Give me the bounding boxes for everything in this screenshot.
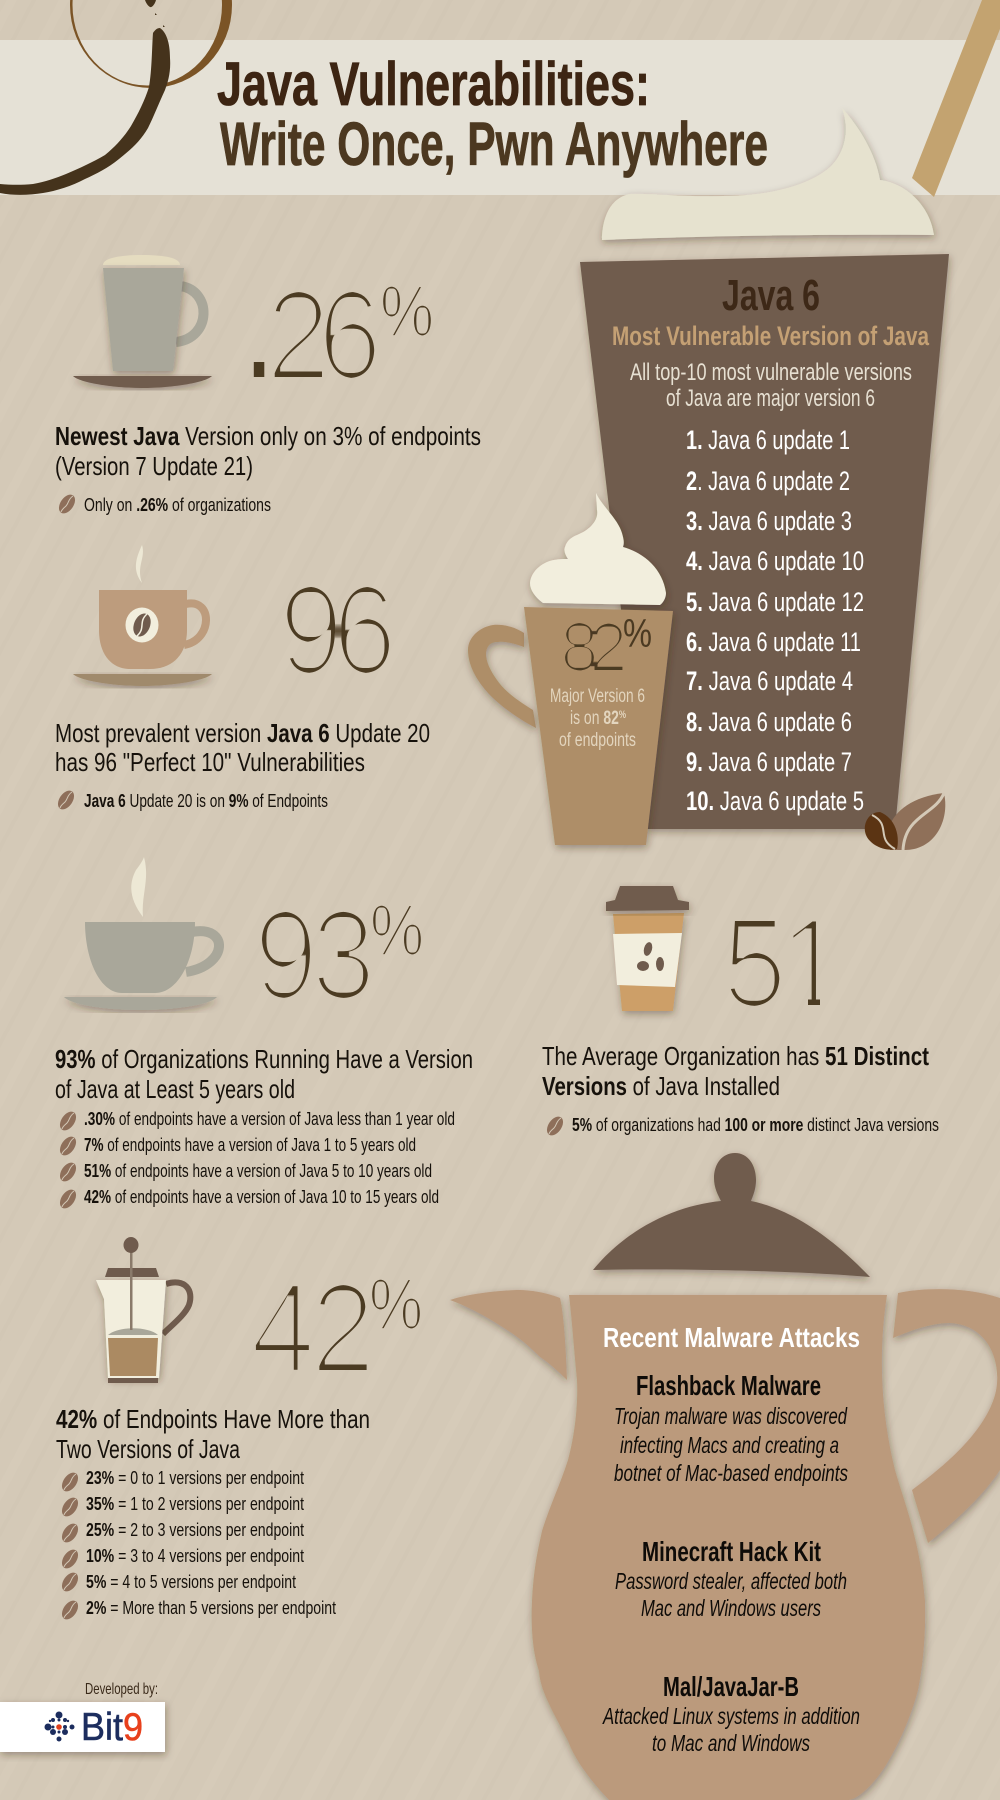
51 number: 1 (779, 893, 844, 1034)
description: 42% of Endpoints Have More than (56, 1404, 370, 1434)
description: (Version 7 Update 21) (55, 451, 253, 481)
Java 6 heading: Java 6 (722, 271, 820, 320)
caption: % (619, 709, 626, 721)
82% stat: % (623, 612, 652, 656)
icon: pot spout (450, 1290, 567, 1380)
description (630, 359, 912, 412)
icon: pot handle (893, 1289, 1000, 1543)
bullet (55, 788, 328, 812)
caption: of endpoints (559, 730, 636, 751)
description (55, 421, 481, 481)
icon: pot lid (593, 1153, 870, 1277)
top ten list: 5. Java 6 update 12 (686, 587, 864, 617)
top ten list: 3. Java 6 update 3 (686, 506, 852, 536)
Flashback entry: Trojan malware was discovered (614, 1403, 848, 1429)
header band (0, 40, 1000, 195)
42% number: 42 (250, 1258, 375, 1399)
caption: is on 82 (570, 708, 624, 729)
top ten list: 4. Java 6 update 10 (686, 546, 864, 576)
bullet: 5% of organizations had 100 or more distinct Java versions (572, 1115, 939, 1135)
description: Two Versions of Java (56, 1434, 240, 1464)
panel: Java 6 large cup (580, 254, 949, 829)
panel: 51 versions stat (542, 886, 939, 1138)
developed by label: Developed by: (85, 1681, 158, 1698)
description: Newest Java Version only on 3% of endpoints (55, 421, 481, 451)
bullets (57, 1109, 455, 1211)
description: All top-10 most vulnerable versions (630, 359, 912, 386)
icon: small whipped cream (530, 493, 666, 605)
51 number (731, 921, 820, 1006)
bullets: .30% of endpoints have a version of Java less than 1 year old (84, 1109, 455, 1129)
title: Write Once, Pwn Anywhere (220, 110, 768, 178)
Mal/JavaJar entry (602, 1671, 860, 1756)
description: has 96 "Perfect 10" Vulnerabilities (55, 747, 365, 777)
panel: 42% stat (56, 1237, 423, 1622)
description: of Java at Least 5 years old (55, 1074, 295, 1104)
description (55, 1044, 473, 1104)
pot heading: Recent Malware Attacks (603, 1322, 860, 1353)
icon: cup handle (468, 625, 536, 728)
icon: coffee stroke stain (0, 0, 170, 195)
panel: newest Java stat (55, 255, 481, 516)
top ten list: 9. Java 6 update 7 (686, 747, 852, 777)
bullets (59, 1468, 336, 1622)
bullets: 7% of endpoints have a version of Java 1 to 5 years old (84, 1135, 416, 1155)
icon: steaming grey cup (64, 857, 219, 1010)
caption: Major Version 6 (550, 686, 645, 707)
top ten list: 6. Java 6 update 11 (686, 627, 861, 657)
bullets: 51% of endpoints have a version of Java 5 to 10 years old (84, 1161, 432, 1181)
description: Most prevalent version Java 6 Update 20 (55, 718, 430, 748)
icon: french press (96, 1237, 190, 1383)
42% number: % (369, 1265, 423, 1345)
icon: coffee cup with bean (73, 545, 212, 686)
top ten list: 8. Java 6 update 6 (686, 707, 852, 737)
bullets: 23% = 0 to 1 versions per endpoint (86, 1468, 304, 1488)
top ten list: 2. Java 6 update 2 (686, 466, 850, 496)
icon: to-go cup (606, 886, 689, 1011)
caption (550, 686, 645, 751)
Flashback entry (614, 1370, 848, 1486)
panel: 96 vulnerabilities stat (55, 545, 430, 812)
Flashback entry: botnet of Mac-based endpoints (614, 1460, 848, 1486)
panel: 93% stat (55, 857, 473, 1211)
top ten list: 1. Java 6 update 1 (686, 425, 850, 455)
.26% stat: % (380, 272, 434, 352)
icon: straw (912, 0, 1000, 197)
bullets: 10% = 3 to 4 versions per endpoint (86, 1546, 304, 1566)
top ten list (686, 425, 864, 816)
title: Java Vulnerabilities: (217, 50, 650, 118)
cup body (524, 607, 673, 845)
bullet: Java 6 Update 20 is on 9% of Endpoints (84, 791, 328, 811)
82% stat: 82 (560, 608, 628, 686)
logo: Bit9 (0, 1702, 165, 1752)
description (56, 1404, 370, 1464)
Mal/JavaJar entry: to Mac and Windows (652, 1730, 810, 1756)
bullets: 5% = 4 to 5 versions per endpoint (86, 1572, 296, 1592)
Minecraft entry: Minecraft Hack Kit (642, 1536, 821, 1567)
panel: 82% small cup (468, 607, 673, 845)
bullets: 25% = 2 to 3 versions per endpoint (86, 1520, 304, 1540)
description (542, 1041, 929, 1101)
Mal/JavaJar entry: Mal/JavaJar-B (663, 1671, 799, 1702)
icon: logo mark (44, 1712, 74, 1742)
logo text: Bit9 (81, 1706, 143, 1749)
top ten list: 7. Java 6 update 4 (686, 666, 853, 696)
bullets: 35% = 1 to 2 versions per endpoint (86, 1494, 304, 1514)
93% number: % (370, 891, 424, 971)
top ten list: 10. Java 6 update 5 (686, 786, 864, 816)
icon: coffee beans corner (865, 793, 945, 850)
Minecraft entry: Mac and Windows users (641, 1595, 821, 1621)
title (217, 50, 768, 178)
bullets: 42% of endpoints have a version of Java 10 to 15 years old (84, 1187, 439, 1207)
bullets: 2% = More than 5 versions per endpoint (86, 1598, 336, 1618)
Minecraft entry: Password stealer, affected both (615, 1568, 847, 1594)
icon: coffee ring stain (70, 0, 232, 88)
pot body (532, 1295, 925, 1800)
51 number: 5 (722, 893, 787, 1034)
Mal/JavaJar entry: Attacked Linux systems in addition (602, 1703, 860, 1729)
Flashback entry: Flashback Malware (636, 1370, 821, 1401)
description: of Java are major version 6 (666, 385, 875, 412)
Minecraft entry (615, 1536, 847, 1621)
Flashback entry: infecting Macs and creating a (620, 1432, 839, 1458)
icon: latte mug (73, 255, 212, 388)
bullet: Only on .26% of organizations (84, 495, 271, 515)
description: Versions of Java Installed (542, 1071, 780, 1101)
panel: coffee pot malware attacks (450, 1289, 1000, 1800)
icon: big whipped cream (602, 108, 934, 240)
description: The Average Organization has 51 Distinct (542, 1041, 929, 1071)
description: 93% of Organizations Running Have a Version (55, 1044, 473, 1074)
96 stat: 96 (279, 560, 397, 701)
bullet (56, 492, 271, 516)
bullet (544, 1114, 939, 1138)
93% number: 93 (253, 885, 376, 1026)
.26% stat: .26 (243, 265, 382, 406)
description (55, 718, 430, 777)
